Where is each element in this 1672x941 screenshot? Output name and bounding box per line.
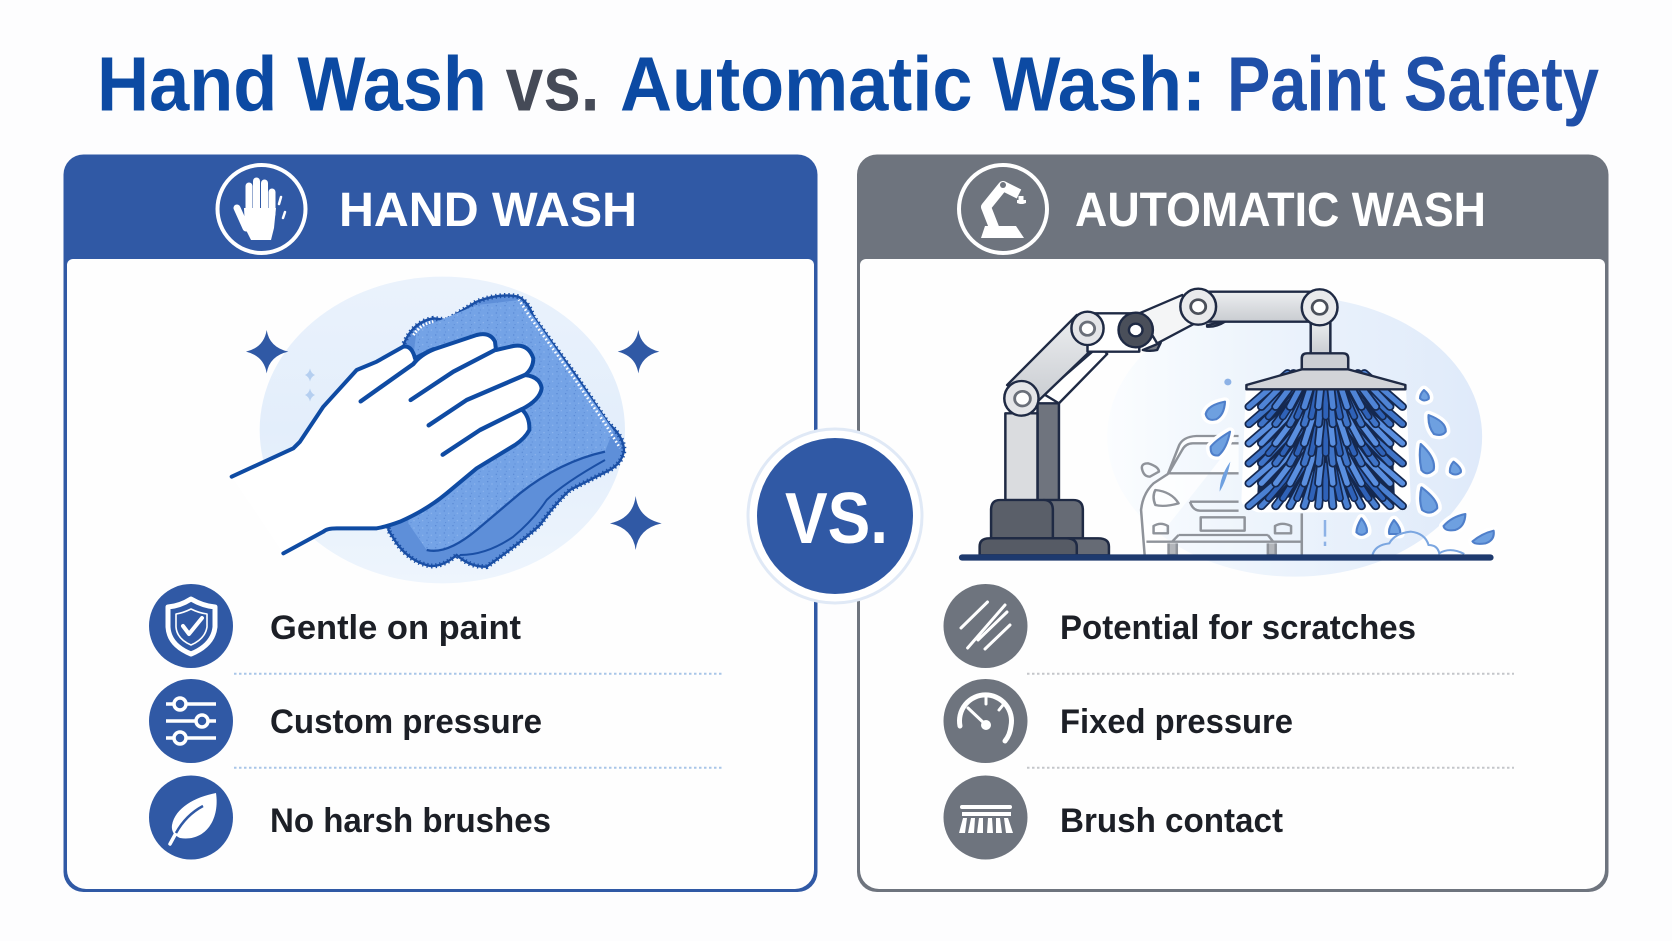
feature: fixed pressure: Fixed pressure	[1060, 703, 1293, 741]
towel	[388, 295, 624, 567]
sparkles	[246, 330, 662, 550]
vs badge	[748, 429, 922, 603]
feature: custom pressure	[149, 679, 542, 763]
title: Paint Safety	[1227, 42, 1599, 128]
joints	[1004, 381, 1039, 416]
feature: potential for scratches: Potential for scratches	[1060, 609, 1416, 647]
robot base	[980, 403, 1109, 555]
hand	[232, 334, 542, 553]
feature: fixed pressure	[944, 679, 1293, 763]
panel: hand wash	[64, 154, 818, 892]
title: Automatic Wash:	[620, 42, 1206, 128]
finger lines	[361, 349, 525, 455]
feature: brush contact	[944, 776, 1283, 860]
heading: hand wash: HAND WASH	[339, 184, 637, 237]
title	[97, 42, 1599, 128]
brush head	[1302, 353, 1348, 371]
heading: automatic wash: AUTOMATIC WASH	[1075, 184, 1486, 237]
illustration: hand wiping with microfiber towel	[232, 277, 662, 583]
background circle	[260, 277, 625, 583]
car	[1141, 436, 1302, 555]
icon: gauge	[960, 695, 1012, 741]
feature: potential for scratches	[944, 584, 1416, 668]
background circle	[1107, 297, 1482, 577]
panel: automatic wash	[857, 154, 1608, 892]
robot arm	[1004, 289, 1405, 416]
feature: brush contact: Brush contact	[1060, 802, 1283, 840]
icon: raised hand	[218, 165, 306, 253]
icon: shield check	[168, 599, 215, 654]
title: Hand Wash	[97, 42, 487, 128]
vs badge: VS.	[785, 479, 888, 559]
ground line	[959, 554, 1494, 561]
feature: gentle on paint: Gentle on paint	[270, 609, 521, 647]
feature: custom pressure: Custom pressure	[270, 703, 542, 741]
icon: scratches	[961, 602, 1010, 649]
rotating brush	[1249, 373, 1403, 506]
water drops	[1206, 379, 1494, 555]
title: vs.	[506, 42, 600, 128]
feature: no harsh brushes: No harsh brushes	[270, 802, 551, 840]
illustration: robot arm brush over car	[959, 289, 1494, 577]
icon: brush	[959, 805, 1013, 833]
icon: sliders	[166, 698, 216, 744]
feature: no harsh brushes	[149, 776, 551, 860]
feature: gentle on paint	[149, 584, 521, 668]
icon: robot arm	[959, 165, 1047, 253]
icon: leaf	[170, 793, 217, 844]
